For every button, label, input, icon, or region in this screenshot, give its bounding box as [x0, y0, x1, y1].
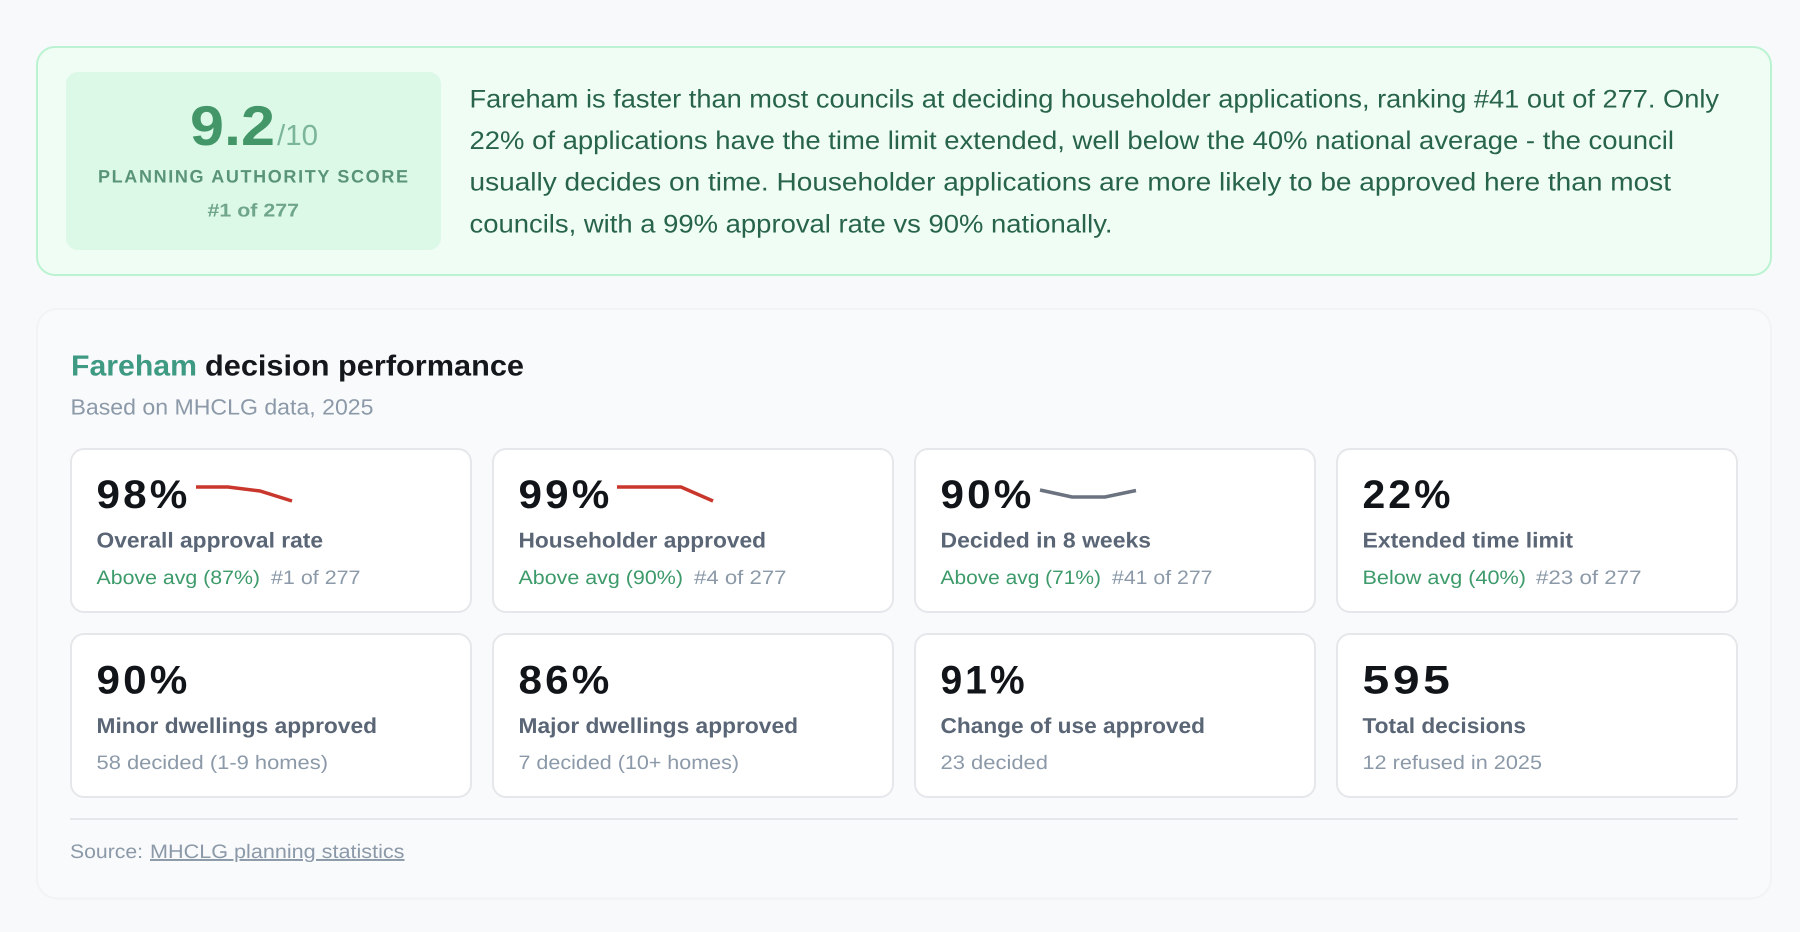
card: overall approval rate — [71, 449, 471, 612]
score label: PLANNING AUTHORITY SCORE — [98, 166, 408, 186]
value: 86% — [518, 658, 612, 702]
summary paragraph — [470, 86, 1719, 238]
detail: 58 decided (1-9 homes) — [96, 752, 328, 774]
subheading: Based on MHCLG data, 2025 — [70, 394, 374, 420]
card: householder approved — [493, 449, 893, 612]
label: Extended time limit — [1362, 528, 1573, 552]
label: Change of use approved — [940, 714, 1205, 738]
label: Decided in 8 weeks — [940, 528, 1151, 552]
score rank: #1 of 277 — [208, 200, 299, 220]
heading — [71, 350, 524, 382]
value: 90% — [96, 658, 190, 702]
card: minor dwellings approved — [71, 634, 471, 797]
sparkline — [196, 487, 292, 501]
detail: 12 refused in 2025 — [1362, 752, 1542, 774]
summary paragraph: Fareham is faster than most councils at deciding householder applications, ranking #41 out of 277. Only — [470, 86, 1719, 114]
score denominator: /10 — [277, 120, 318, 152]
source note: MHCLG planning statistics — [150, 841, 405, 863]
sparkline — [617, 487, 713, 501]
card: extended time limit — [1337, 449, 1737, 612]
rank: #4 of 277 — [694, 567, 786, 589]
value: 91% — [940, 658, 1028, 702]
summary paragraph: 22% of applications have the time limit extended, well below the 40% national average - the council — [470, 127, 1674, 155]
label: Major dwellings approved — [518, 714, 798, 738]
label: Overall approval rate — [96, 528, 323, 552]
card: major dwellings approved — [493, 634, 893, 797]
value: 98% — [96, 473, 190, 517]
detail: 7 decided (10+ homes) — [518, 752, 739, 774]
label: Total decisions — [1362, 714, 1526, 738]
value: 22% — [1362, 473, 1454, 517]
rank: #1 of 277 — [271, 567, 360, 589]
detail: 23 decided — [940, 752, 1048, 774]
label: Minor dwellings approved — [96, 714, 377, 738]
panel: score summary — [37, 47, 1771, 275]
source note: Source: — [70, 841, 143, 863]
score value: 9.2 — [190, 94, 275, 157]
comparison: Below avg (40%) — [1362, 567, 1526, 589]
heading: decision performance — [205, 350, 524, 382]
label: Householder approved — [518, 528, 766, 552]
card: change of use approved — [915, 634, 1315, 797]
sparkline — [1040, 490, 1136, 497]
comparison: Above avg (87%) — [96, 567, 260, 589]
panel: planning authority score — [66, 72, 441, 250]
panel: decision performance — [37, 309, 1771, 898]
comparison: Above avg (90%) — [518, 567, 683, 589]
rank: #23 of 277 — [1536, 567, 1642, 589]
value: 595 — [1362, 658, 1454, 702]
heading: Fareham — [71, 350, 197, 382]
summary paragraph: councils, with a 99% approval rate vs 90% nationally. — [470, 210, 1112, 238]
value: 90% — [940, 473, 1034, 517]
summary paragraph: usually decides on time. Householder applications are more likely to be approved here than most — [470, 168, 1671, 196]
card: total decisions — [1337, 634, 1737, 797]
value: 99% — [518, 473, 612, 517]
comparison: Above avg (71%) — [940, 567, 1101, 589]
card: decided in 8 weeks — [915, 449, 1315, 612]
source note — [70, 841, 405, 863]
rank: #41 of 277 — [1112, 567, 1212, 589]
